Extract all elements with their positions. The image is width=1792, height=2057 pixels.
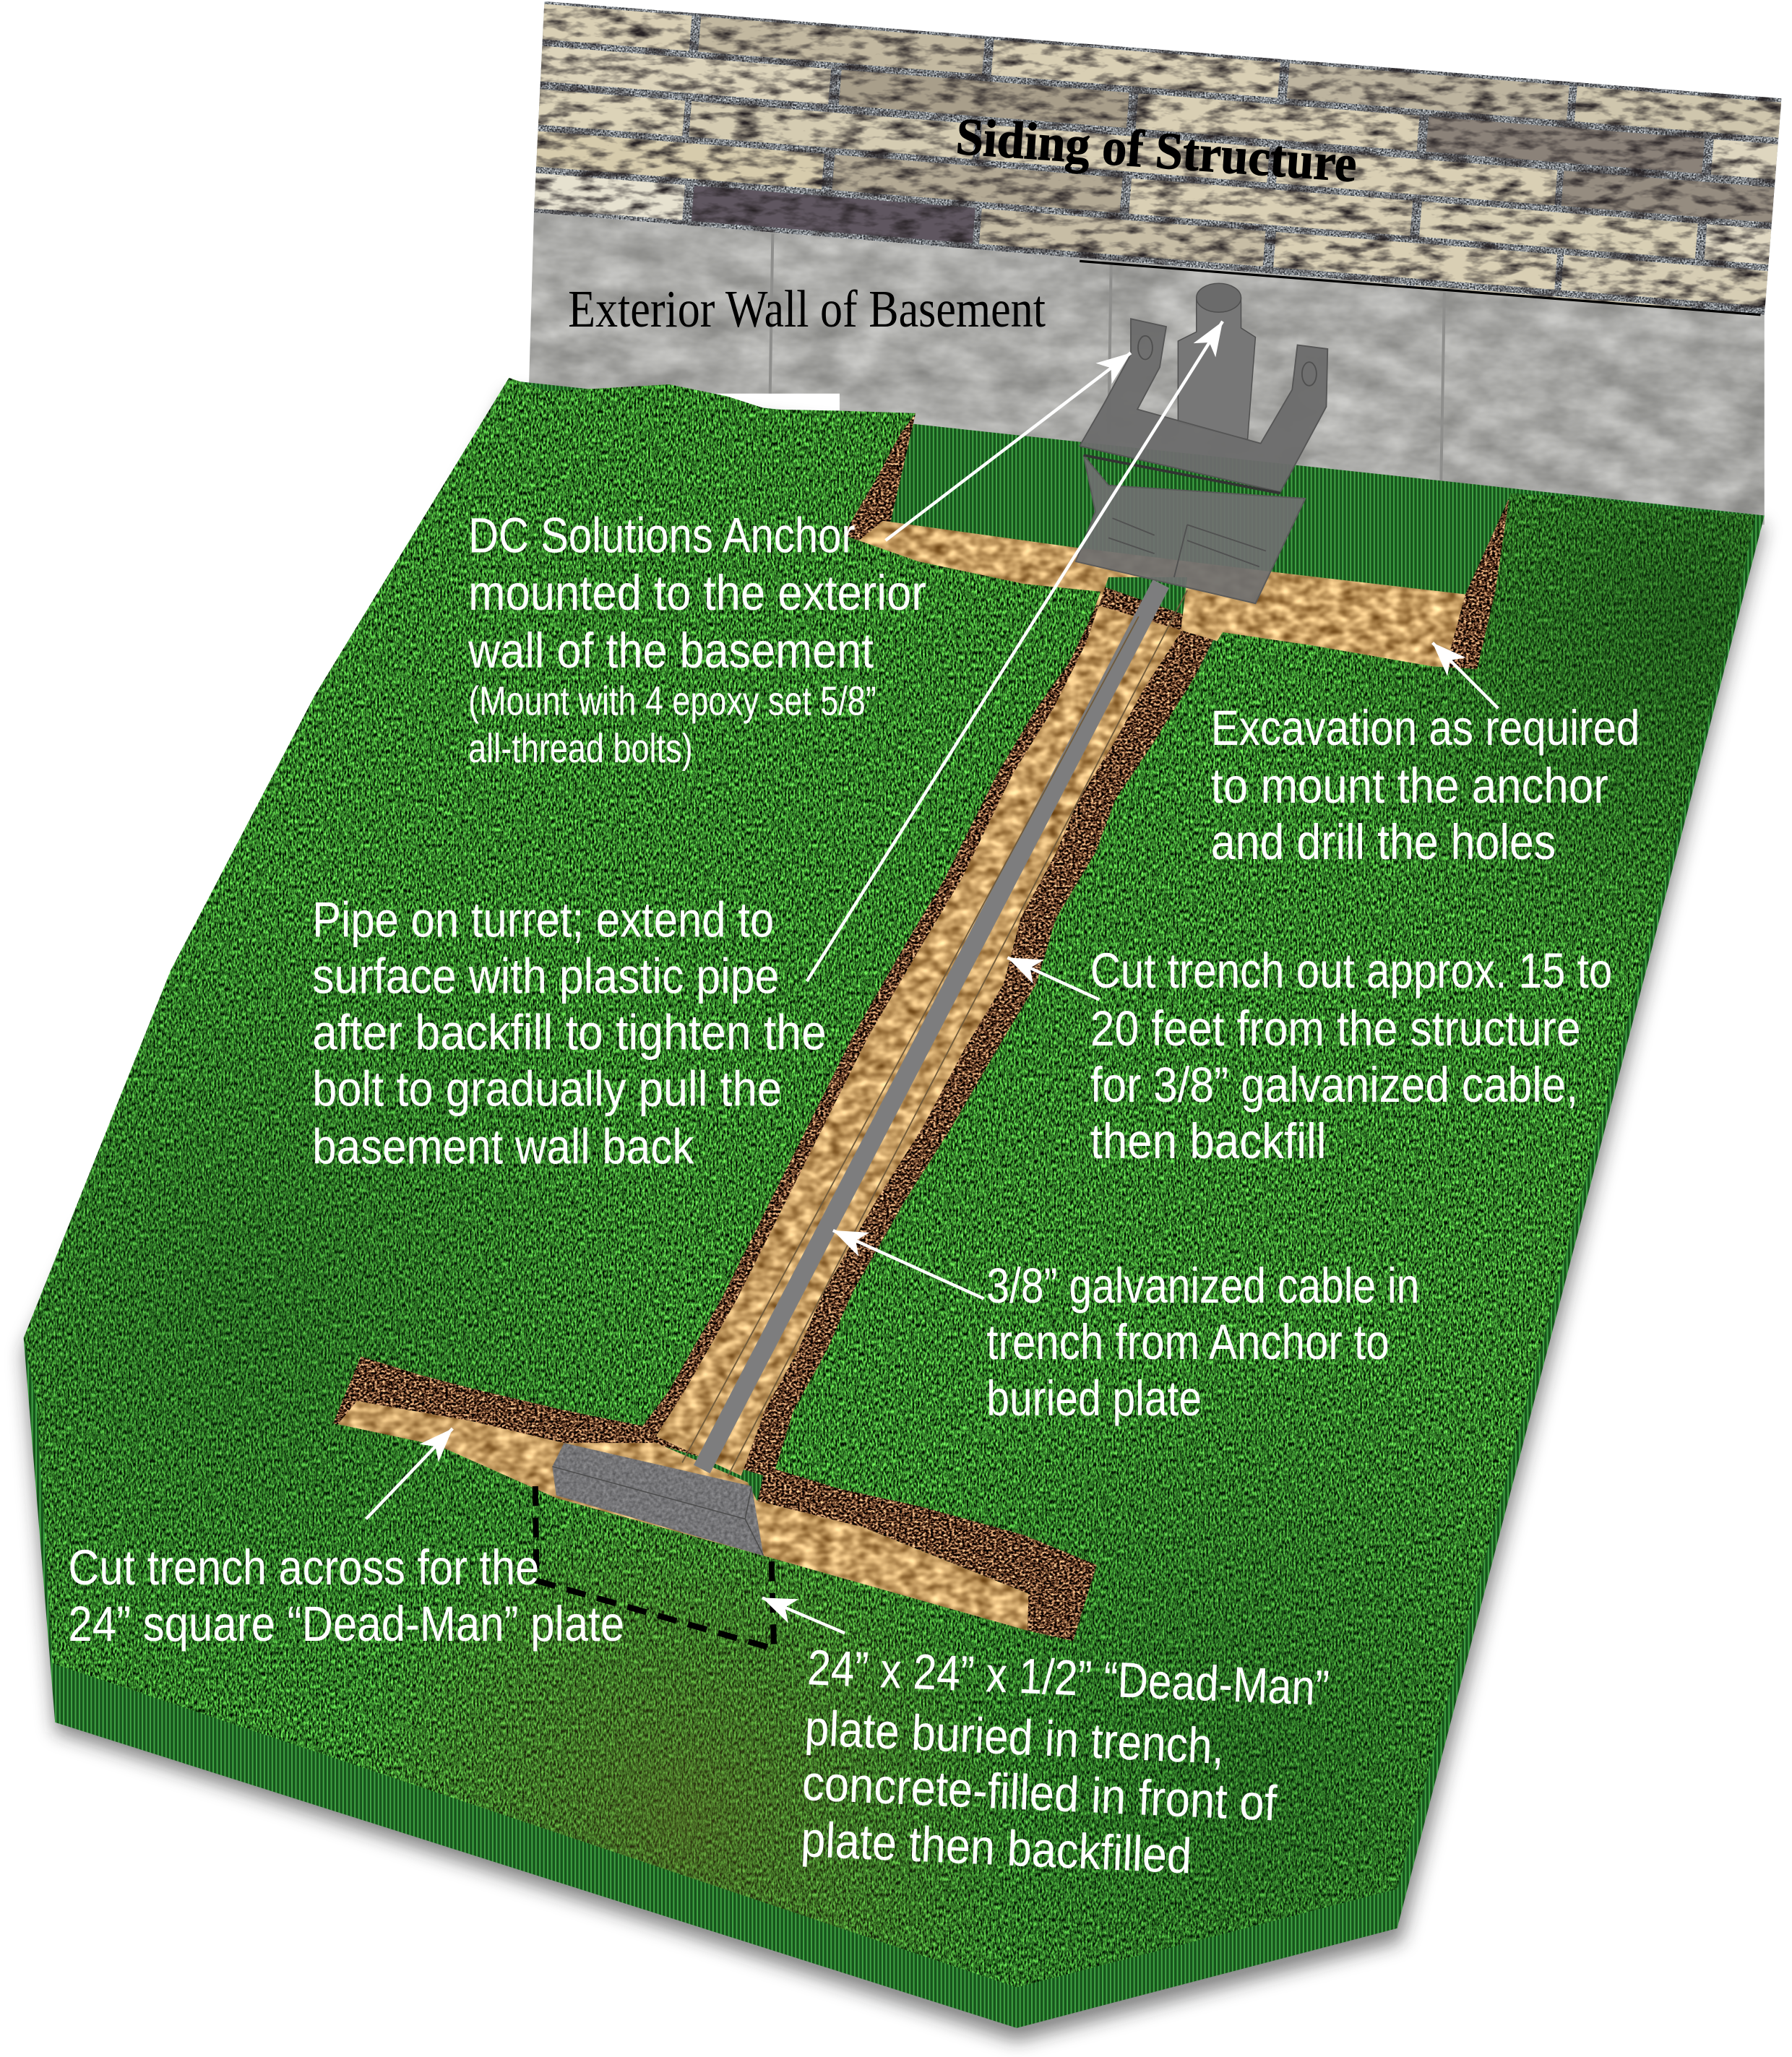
- block side band: [24, 381, 1765, 2028]
- arrow: to trench: [1007, 957, 1099, 999]
- panel: exterior basement concrete wall: [529, 212, 1765, 525]
- dashed outline of buried plate: [535, 1486, 774, 1649]
- text: cross trench note: 24” square “Dead-Man” plate: [68, 1596, 624, 1652]
- text: cut trench note: then backfill: [1090, 1113, 1326, 1169]
- text: pipe on turret note: surface with plastic pipe: [312, 948, 779, 1004]
- text: DC Solutions anchor note: (Mount with 4 epoxy set 5/8”: [468, 678, 876, 724]
- text: cross trench note: Cut trench across for the: [68, 1540, 539, 1595]
- text: pipe on turret note: bolt to gradually pull the: [312, 1061, 782, 1117]
- text: cross trench note: [68, 1540, 624, 1652]
- text: excavation note: Excavation as required: [1211, 700, 1640, 756]
- text: pipe on turret note: Pipe on turret; extend to: [312, 892, 774, 947]
- text: dead-man plate note: plate buried in trench,: [804, 1700, 1225, 1774]
- arrow: to excavation: [1433, 643, 1498, 708]
- text: galvanized cable note: 3/8” galvanized cable in: [986, 1258, 1419, 1314]
- text: DC Solutions anchor note: [468, 507, 926, 771]
- text: cut trench note: for 3/8” galvanized cable,: [1090, 1057, 1578, 1113]
- text: galvanized cable note: trench from Anchor to: [986, 1314, 1390, 1370]
- icon: DC Solutions anchor: [1076, 283, 1327, 603]
- arrow: to cross trench: [366, 1428, 452, 1519]
- arrow: to cable: [833, 1230, 984, 1298]
- drop shadow under ground block: [24, 394, 1765, 2041]
- text: excavation note: and drill the holes: [1211, 814, 1556, 870]
- text: DC Solutions anchor note: wall of the basement: [468, 623, 874, 678]
- arrow: to dead-man plate: [762, 1597, 845, 1633]
- arrow: to anchor: [885, 353, 1131, 540]
- text: DC Solutions anchor note: DC Solutions Anchor: [468, 507, 856, 563]
- anchor lower plate: [1076, 455, 1305, 603]
- panel: siding of structure brick wall: [534, 1, 1782, 315]
- text: cut trench note: [1090, 943, 1612, 1169]
- text: galvanized cable note: buried plate: [986, 1371, 1202, 1426]
- dead-man plate: [544, 1436, 774, 1561]
- trench: sand floor: [315, 512, 1483, 1653]
- text: pipe on turret note: after backfill to tighten the: [312, 1004, 827, 1060]
- anchor yoke with arms: [1080, 319, 1327, 492]
- text: DC Solutions anchor note: mounted to the exterior: [468, 565, 926, 621]
- ground surface: grass: [0, 367, 1792, 1994]
- anchor turret and pipe: [1178, 283, 1255, 439]
- text: cut trench note: Cut trench out approx. 15 to: [1090, 943, 1612, 999]
- text: pipe on turret note: basement wall back: [312, 1118, 694, 1174]
- text: pipe on turret note: [312, 892, 827, 1174]
- text: dead-man plate note: concrete-filled in front of: [801, 1755, 1278, 1832]
- arrows: [366, 322, 1498, 1633]
- cable in trench: [682, 584, 1187, 1476]
- text: cut trench note: 20 feet from the structure: [1090, 1001, 1581, 1056]
- text: galvanized cable note: [986, 1258, 1419, 1426]
- text: dead-man plate note: plate then backfilled: [800, 1811, 1193, 1884]
- text: dead-man plate note: 24” x 24” x 1/2” “Dead-Man”: [806, 1639, 1330, 1716]
- text: DC Solutions anchor note: all-thread bolts): [468, 725, 693, 771]
- heading: exterior wall of basement: Exterior Wall of Basement: [568, 280, 1046, 338]
- trench: gravel edges: [315, 407, 1522, 1653]
- text: excavation note: [1211, 700, 1640, 870]
- heading: siding of structure: Siding of Structure: [955, 107, 1358, 193]
- arrow: to pipe on turret: [807, 322, 1223, 981]
- text: dead-man plate note: [800, 1639, 1330, 1884]
- text: excavation note: to mount the anchor: [1211, 758, 1608, 814]
